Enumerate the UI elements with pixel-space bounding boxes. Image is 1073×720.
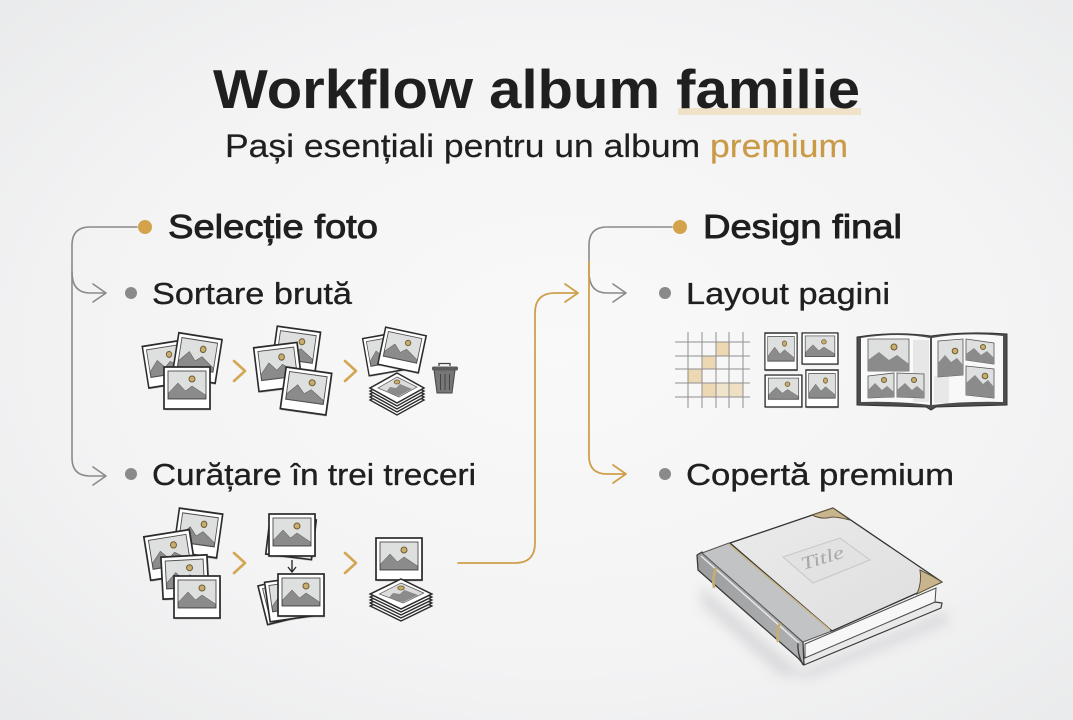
title plate <box>783 538 870 583</box>
title: Workflow album familie <box>213 58 860 120</box>
icon: photo collage <box>765 333 839 408</box>
icon: premium album cover <box>697 508 950 678</box>
chevron <box>234 553 245 573</box>
connector: gold to cover <box>589 262 626 483</box>
chevron <box>345 361 356 381</box>
icon: sorted photos <box>254 326 333 417</box>
icon: open album <box>857 333 1007 410</box>
connector: right tree gray <box>589 227 672 302</box>
icon: final photo and pile <box>370 538 432 621</box>
corners <box>812 508 850 520</box>
icon: selected photos and pile <box>363 327 427 415</box>
icon: raw photo pile <box>142 333 223 410</box>
page block <box>803 602 942 665</box>
heading: Design final: Design final <box>703 208 902 245</box>
connector: left tree <box>72 227 137 485</box>
cover <box>730 508 942 631</box>
heading: Selecție foto: Selecție foto <box>168 208 378 245</box>
item: Curățare în trei treceri: Curățare în trei treceri <box>152 457 476 492</box>
icon: trash can <box>432 364 458 393</box>
item: Copertă premium: Copertă premium <box>686 457 954 492</box>
icon: premium album cover: Title <box>798 542 846 574</box>
chevron <box>234 361 245 381</box>
item: Layout pagini: Layout pagini <box>686 276 890 311</box>
spine <box>697 552 804 665</box>
subtitle: Pași esențiali pentru un album premium <box>225 128 848 164</box>
chevron <box>345 553 356 573</box>
icon: passes with arrow <box>258 514 325 626</box>
item: Sortare brută: Sortare brută <box>152 276 353 311</box>
icon: layout grid <box>675 332 750 408</box>
icon: messy photos <box>144 508 224 620</box>
arrow: gold link between columns <box>458 284 578 563</box>
